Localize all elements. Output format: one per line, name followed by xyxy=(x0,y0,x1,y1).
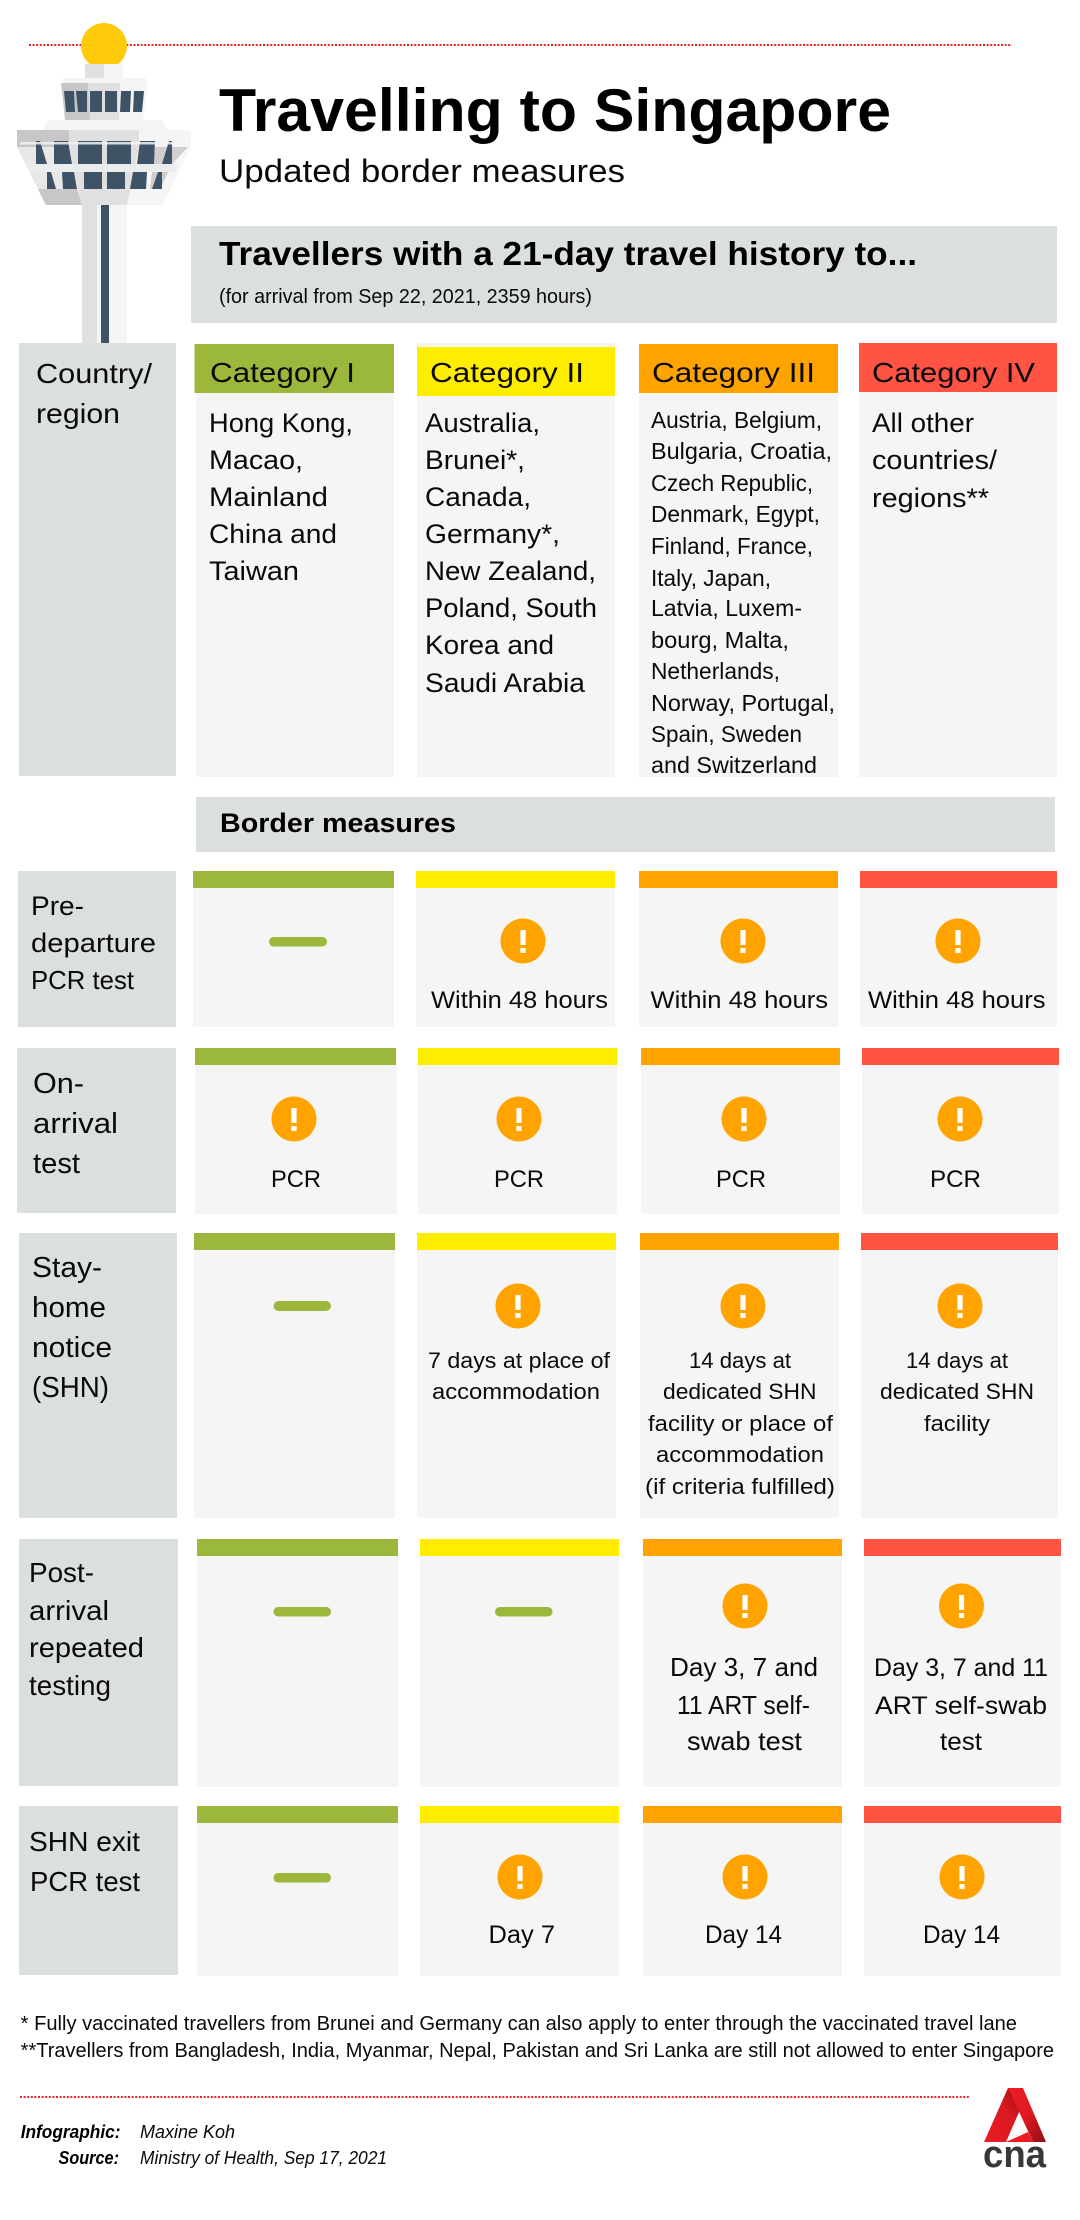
Category I cell: PCR xyxy=(271,1166,321,1193)
icon: Changi control tower xyxy=(17,23,191,343)
row label: arrival xyxy=(33,1108,118,1140)
Category IV cell xyxy=(864,1539,1061,1787)
panel: travel history heading xyxy=(191,226,1057,323)
title: Travelling to Singapore xyxy=(219,77,891,144)
panel: Category III countries: Category III xyxy=(652,357,815,388)
credits: Source: xyxy=(58,2148,119,2168)
row label: (SHN) xyxy=(32,1372,109,1404)
row label: On- xyxy=(33,1068,84,1100)
Category IV cell: Day 3, 7 and 11 xyxy=(874,1654,1048,1682)
footnotes: **Travellers from Bangladesh, India, Myanmar, Nepal, Pakistan and Sri Lanka are still not allowed to enter Singapore xyxy=(21,2040,1054,2062)
Category III cell xyxy=(643,1806,842,1976)
panel: Category II countries: Australia, xyxy=(425,408,540,438)
panel: Category I countries xyxy=(194,344,394,777)
Category III cell: swab test xyxy=(687,1726,803,1756)
Category II cell xyxy=(417,1233,616,1518)
icon: CNA logo xyxy=(983,2088,1047,2176)
Category IV cell: test xyxy=(940,1728,982,1756)
panel: Category III countries: Czech Republic, xyxy=(651,470,813,496)
row label: home xyxy=(32,1292,106,1324)
Category II cell xyxy=(420,1806,619,1976)
credits xyxy=(21,2122,387,2168)
Category I cell xyxy=(193,871,394,1027)
panel: border measures heading xyxy=(196,797,1055,852)
row label: PCR test xyxy=(31,965,135,995)
Category I cell xyxy=(197,1806,398,1976)
panel: Category III countries: Netherlands, xyxy=(651,658,780,684)
Category II cell: Within 48 hours xyxy=(431,987,608,1014)
panel: Category II countries xyxy=(417,343,615,777)
row label: repeated xyxy=(29,1632,144,1663)
row label: departure xyxy=(31,928,156,958)
panel: Category II countries: Canada, xyxy=(425,482,531,512)
Category II cell: accommodation xyxy=(432,1379,600,1404)
panel: Category I countries: Category I xyxy=(210,357,355,388)
panel: Category III countries: Norway, Portugal, xyxy=(651,690,835,716)
Category III cell: (if criteria fulfilled) xyxy=(645,1474,835,1499)
panel: Category III countries: Bulgaria, Croatia, xyxy=(651,438,832,464)
panel: Category III countries: Italy, Japan, xyxy=(651,565,771,591)
row label: PCR test xyxy=(30,1866,140,1897)
Category I cell xyxy=(195,1048,397,1214)
panel: Category III countries: Austria, Belgium, xyxy=(651,407,822,433)
panel: Category I countries: Macao, xyxy=(209,445,303,475)
Category II cell: PCR xyxy=(494,1166,544,1193)
row label: Post- xyxy=(29,1557,94,1588)
Category II cell: 7 days at place of xyxy=(428,1348,611,1373)
row label: arrival xyxy=(29,1595,109,1626)
Category III cell: Within 48 hours xyxy=(650,987,828,1014)
row: post-arrival repeated testing xyxy=(19,1539,1061,1787)
row label xyxy=(19,1806,178,1975)
panel: Category III countries: Spain, Sweden xyxy=(651,721,802,747)
panel: Category I countries: Hong Kong, xyxy=(209,408,353,438)
panel: Category III countries: Latvia, Luxem- xyxy=(651,595,802,621)
panel: Category III countries: and Switzerland xyxy=(651,752,817,778)
row label xyxy=(19,1539,178,1786)
subtitle: Updated border measures xyxy=(219,153,625,189)
row label: Stay- xyxy=(32,1252,102,1284)
panel: Category IV countries: All other xyxy=(872,408,974,438)
Category II cell xyxy=(420,1539,619,1787)
panel: Category I countries: Taiwan xyxy=(209,556,299,586)
icon: CNA logo: cna xyxy=(983,2134,1047,2176)
panel: Category II countries: Brunei*, xyxy=(425,445,525,475)
panel: Category III countries xyxy=(639,344,838,778)
Category III cell xyxy=(643,1539,842,1787)
Category IV cell: PCR xyxy=(930,1166,981,1193)
panel: Category III countries: bourg, Malta, xyxy=(651,627,789,653)
Category III cell: facility or place of xyxy=(648,1411,834,1436)
panel: country/region label xyxy=(19,343,176,776)
row: pre-departure PCR test xyxy=(18,871,1057,1027)
Category IV cell: Within 48 hours xyxy=(868,987,1046,1014)
credits: Maxine Koh xyxy=(140,2122,235,2142)
row label: testing xyxy=(29,1670,111,1701)
panel: Category II countries: Category II xyxy=(430,357,584,388)
Category III cell xyxy=(639,871,838,1027)
row label: test xyxy=(33,1148,80,1180)
row label: SHN exit xyxy=(29,1826,140,1857)
Category IV cell xyxy=(862,1048,1059,1214)
Category II cell: Day 7 xyxy=(488,1921,555,1949)
panel: Category IV countries: Category IV xyxy=(872,357,1035,388)
Category III cell: Day 3, 7 and xyxy=(670,1652,818,1682)
Category III cell: accommodation xyxy=(656,1442,824,1467)
credits: Infographic: xyxy=(21,2122,121,2142)
panel: Category II countries: New Zealand, xyxy=(425,556,596,586)
Category IV cell: 14 days at xyxy=(906,1348,1008,1373)
panel: Category II countries: Saudi Arabia xyxy=(425,668,586,698)
Category III cell: 11 ART self- xyxy=(677,1690,810,1720)
panel: Category IV countries xyxy=(859,343,1057,777)
Category IV cell xyxy=(860,871,1057,1027)
footnotes: * Fully vaccinated travellers from Brunei and Germany can also apply to enter through the vaccinated travel lane xyxy=(21,2013,1017,2035)
Category I cell xyxy=(197,1539,398,1787)
Category IV cell: facility xyxy=(924,1411,990,1436)
credits: Ministry of Health, Sep 17, 2021 xyxy=(140,2148,387,2168)
panel: Category I countries: China and xyxy=(209,519,337,549)
Category III cell xyxy=(641,1048,840,1214)
Category IV cell xyxy=(864,1806,1061,1976)
row label: notice xyxy=(32,1332,112,1364)
panel: Category II countries: Poland, South xyxy=(425,593,597,623)
row label xyxy=(17,1048,176,1213)
row label xyxy=(18,871,176,1027)
Category III cell: PCR xyxy=(716,1166,766,1193)
row label: Pre- xyxy=(31,891,84,921)
row: SHN exit PCR test xyxy=(19,1806,1061,1976)
footnotes xyxy=(21,2013,1054,2062)
panel: Category IV countries: countries/ xyxy=(872,445,998,475)
panel: Category III countries: Finland, France, xyxy=(651,533,813,559)
row: stay-home notice xyxy=(19,1233,1058,1518)
Category III cell: Day 14 xyxy=(705,1921,782,1949)
Category IV cell: ART self-swab xyxy=(875,1692,1047,1720)
arrival date note: (for arrival from Sep 22, 2021, 2359 hours) xyxy=(219,286,592,308)
Category III cell xyxy=(640,1233,839,1518)
Category III cell: dedicated SHN xyxy=(663,1379,816,1404)
Category II cell xyxy=(416,871,615,1027)
Category IV cell: Day 14 xyxy=(923,1921,1000,1949)
panel: country/region label: region xyxy=(36,398,120,429)
heading: Travellers with a 21-day travel history to... xyxy=(219,235,917,272)
panel: Category IV countries: regions** xyxy=(872,483,990,513)
row: on-arrival test xyxy=(17,1048,1059,1214)
panel: Category II countries: Germany*, xyxy=(425,519,560,549)
Category I cell xyxy=(194,1233,395,1518)
Category IV cell xyxy=(861,1233,1058,1518)
Category IV cell: dedicated SHN xyxy=(880,1379,1034,1404)
panel: Category III countries: Denmark, Egypt, xyxy=(651,501,820,527)
Category III cell: 14 days at xyxy=(689,1348,791,1373)
panel: Category II countries: Korea and xyxy=(425,630,554,660)
panel: Category I countries: Mainland xyxy=(209,482,328,512)
panel: country/region label: Country/ xyxy=(36,358,152,389)
Category II cell xyxy=(418,1048,617,1214)
panel: border measures heading: Border measures xyxy=(220,808,456,838)
row label xyxy=(19,1233,177,1518)
